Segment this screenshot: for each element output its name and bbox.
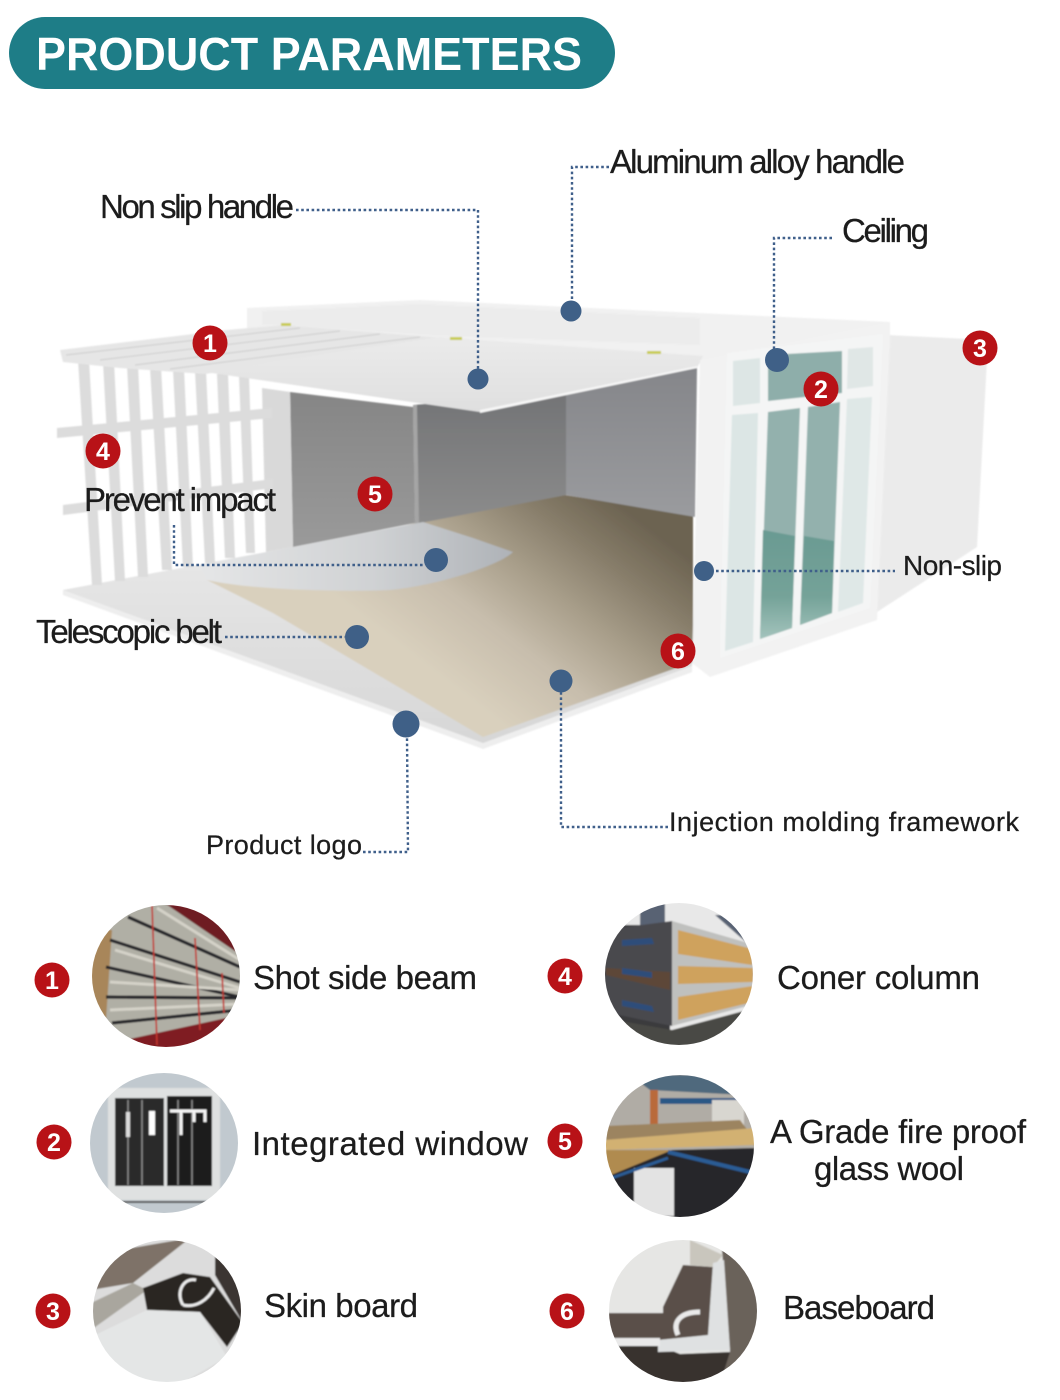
leader lines bbox=[174, 167, 895, 852]
item 1: shot side beam bbox=[34, 900, 477, 1052]
peeled floor edge bbox=[200, 522, 513, 591]
diagram number badges: 5 bbox=[368, 481, 382, 509]
diagram labels: Injection molding framework bbox=[669, 807, 1020, 837]
diagram number badges: 1 bbox=[203, 330, 217, 358]
diagram labels: Telescopic belt bbox=[36, 613, 222, 650]
label: Shot side beam bbox=[253, 959, 477, 996]
item 5: fire proof glass wool bbox=[548, 1073, 1027, 1219]
diagram labels: Non-slip bbox=[903, 550, 1002, 581]
photo: window bbox=[88, 1071, 240, 1215]
label: A Grade fire proof bbox=[770, 1113, 1027, 1150]
photo: beams bbox=[92, 905, 240, 1047]
title banner bbox=[9, 17, 615, 89]
roof flap bbox=[205, 337, 703, 412]
label: Baseboard bbox=[783, 1289, 935, 1326]
sliding beams on top bbox=[60, 325, 445, 374]
right side skin panel bbox=[877, 335, 988, 612]
bottom floor slab bbox=[63, 515, 693, 748]
label: Skin board bbox=[264, 1287, 418, 1324]
callout dots bbox=[345, 300, 789, 738]
front window wall bbox=[692, 322, 890, 677]
telescopic fence bbox=[57, 360, 273, 585]
label bbox=[770, 1113, 1027, 1187]
diagram labels bbox=[36, 143, 1020, 860]
diagram labels: Prevent impact bbox=[84, 481, 276, 518]
yellow markers bbox=[281, 323, 661, 354]
diagram labels: Ceiling bbox=[842, 212, 929, 249]
photo: skin board bbox=[91, 1238, 243, 1384]
diagram number badges: 2 bbox=[814, 376, 828, 404]
item 4: corner column bbox=[548, 901, 980, 1047]
right interior wall bbox=[566, 368, 697, 517]
diagram number badges bbox=[86, 326, 998, 668]
diagram number badges: 4 bbox=[96, 438, 110, 466]
item 2: integrated window: 2 bbox=[47, 1129, 61, 1157]
left interior wall bbox=[290, 392, 415, 547]
label: glass wool bbox=[814, 1150, 964, 1187]
item 1: shot side beam: 1 bbox=[45, 967, 59, 995]
diagram number badges: 3 bbox=[973, 335, 987, 363]
photo: stacked panels bbox=[603, 901, 755, 1047]
item 5: fire proof glass wool: 5 bbox=[558, 1128, 572, 1156]
photo: factory bbox=[604, 1073, 756, 1219]
middle interior wall bbox=[413, 392, 566, 524]
label: Coner column bbox=[777, 959, 980, 996]
item 6: baseboard bbox=[550, 1238, 935, 1384]
item 6: baseboard: 6 bbox=[560, 1298, 574, 1326]
wood floor bbox=[207, 495, 693, 737]
diagram labels: Product logo bbox=[206, 830, 362, 860]
item 3: skin board bbox=[36, 1238, 418, 1384]
item 2: integrated window bbox=[36, 1071, 528, 1215]
diagram labels: Non slip handle bbox=[100, 188, 294, 225]
item 4: corner column: 4 bbox=[558, 963, 572, 991]
back top strip bbox=[247, 300, 890, 364]
window panes bbox=[725, 347, 873, 651]
diagram labels: Aluminum alloy handle bbox=[610, 143, 905, 180]
title banner: PRODUCT PARAMETERS bbox=[36, 28, 582, 80]
label: Integrated window bbox=[252, 1125, 528, 1162]
photo: baseboard corner bbox=[607, 1238, 759, 1384]
diagram number badges: 6 bbox=[671, 638, 685, 666]
container illustration bbox=[57, 300, 988, 749]
item 3: skin board: 3 bbox=[46, 1298, 60, 1326]
left pillar bbox=[262, 388, 293, 552]
